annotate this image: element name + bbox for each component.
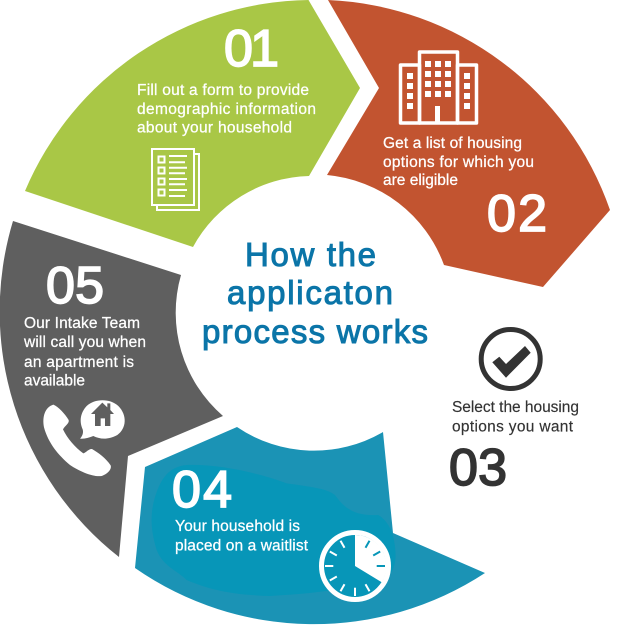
step 5 description: available [24, 373, 85, 390]
panel: step 1 fill out a form [25, 0, 360, 247]
panel: step 3 select options [449, 330, 579, 497]
title: applicaton [227, 274, 393, 311]
panel: step 4 waitlist [135, 427, 485, 624]
title: How the [245, 236, 376, 273]
step number 05: 05 [46, 257, 104, 315]
icon: phone with house speech bubble [43, 400, 125, 476]
step number 03: 03 [449, 439, 507, 497]
step 4 description [175, 518, 309, 555]
step 2 description: are eligible [383, 172, 458, 189]
step 4 description: Your household is [175, 518, 300, 535]
step 4 description: placed on a waitlist [175, 538, 309, 555]
gray segment [0, 221, 223, 557]
red segment [327, 0, 610, 287]
step 2 description: options for which you [383, 154, 534, 171]
blue segment [135, 427, 485, 624]
step 3 description: Select the housing [452, 399, 579, 416]
step 2 description: Get a list of housing [383, 135, 522, 152]
icon: form document [152, 149, 199, 210]
step 3 description [452, 399, 579, 436]
step 2 description [383, 135, 534, 189]
step 1 description: Fill out a form to provide [137, 82, 309, 99]
step 1 description: about your household [137, 120, 292, 136]
panel: step 2 get a list [327, 0, 610, 287]
step 5 description: Our Intake Team [24, 315, 140, 332]
step 5 description [23, 315, 146, 390]
step 5 description: an apartment is [24, 354, 134, 371]
darker blue wash [152, 465, 396, 596]
icon: apartment buildings [400, 52, 476, 123]
step number 01: 01 [224, 20, 279, 78]
icon: check mark circle [481, 330, 540, 388]
step 3 description: options you want [452, 419, 574, 436]
step 1 description [137, 82, 316, 136]
icon: clock [322, 532, 388, 600]
step number 04: 04 [172, 461, 232, 519]
step number 02: 02 [487, 185, 547, 243]
step 1 description: demographic information [137, 101, 316, 118]
title [202, 236, 428, 350]
step 5 description: will call you when [23, 334, 146, 351]
panel: step 5 intake team call [0, 221, 223, 557]
title: process works [202, 313, 428, 350]
green arrow segment [25, 0, 360, 247]
